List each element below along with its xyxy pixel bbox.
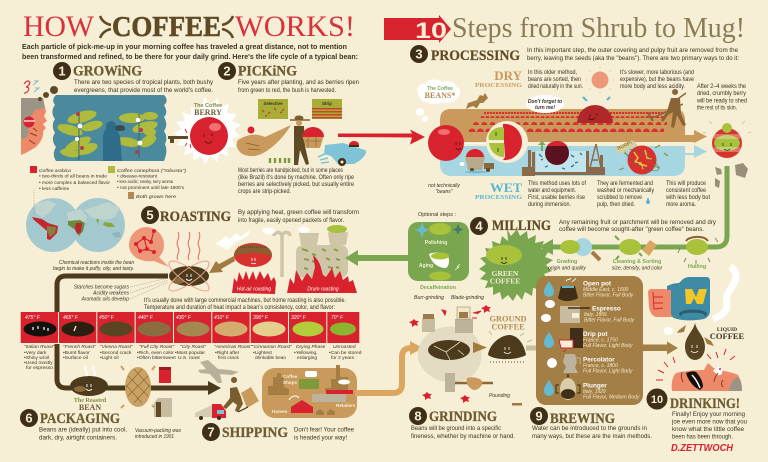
intro text — [22, 42, 358, 61]
not technically note — [428, 183, 460, 195]
brown arrow to mug — [643, 342, 678, 354]
dry text: dried naturally in the sun. — [528, 83, 583, 90]
tan pipe to grinding — [355, 348, 414, 393]
roast descriptions: for 2 years — [331, 355, 355, 361]
step 6 heading — [20, 409, 120, 427]
fermenting berry — [614, 140, 668, 175]
wet texts: First, usable berries rise — [528, 194, 586, 201]
subtitle banner: 10 steps: Steps from Shrub to Mug! — [452, 13, 745, 44]
legend: • disease-resistant — [117, 174, 158, 180]
coffee beans cloud: BEANS* — [425, 91, 455, 100]
grinding labels — [414, 295, 510, 399]
step 5 heading: 5 — [146, 208, 154, 222]
roast descriptions: U.S. roast — [178, 355, 200, 361]
roast descriptions: "City Roast" — [180, 344, 206, 350]
sun icon — [585, 66, 615, 93]
roast descriptions: •Right after — [215, 350, 240, 356]
grading: origin and quality — [548, 266, 586, 272]
dry band — [440, 105, 707, 143]
selective and strip cards — [258, 99, 342, 119]
cleaning & sorting: Cleaning & Sorting — [613, 259, 661, 265]
molecule bubble — [129, 227, 169, 267]
cream strip with dots — [464, 142, 488, 144]
roast strip: 465° F — [63, 315, 79, 321]
processing text: In this important step, the outer covering and pulpy fruit are removed from the — [527, 47, 739, 54]
picking body text: Most berries are handpicked, but in some places — [238, 167, 343, 174]
grinding text — [411, 425, 515, 440]
grinding labels: Burr-grinding — [414, 295, 444, 301]
packaging text: dark, dry, airtight containers. — [39, 434, 117, 442]
dark path: bean to roast strip — [57, 276, 168, 312]
coffee plant panel — [52, 95, 167, 161]
main berry — [428, 125, 464, 161]
wet texts: consistent coffee — [666, 187, 707, 194]
roast descriptions: •Rich, even color — [137, 350, 174, 356]
roast descriptions: •Very dark — [24, 350, 47, 356]
roast strip: 70° F — [331, 315, 344, 321]
brewing panel: France, c. 1800 — [583, 363, 618, 369]
step 10 heading — [646, 388, 740, 412]
intro text: Each particle of pick-me-up in your morning coffee has traveled a great distance, not to mention — [22, 42, 347, 51]
step 4 heading: 4 — [475, 218, 483, 234]
roasting text: By applying heat, green coffee will transform — [238, 209, 359, 216]
pipe stub to brewing — [526, 346, 538, 350]
grinding labels: Blade-grinding — [451, 295, 484, 301]
roasted bean — [70, 366, 108, 412]
picking body text: (like Brazil) it's done by machine. Often only ripe — [238, 174, 355, 181]
step 7 heading: SHIPPING — [222, 425, 288, 441]
step 1 heading: 1 — [58, 64, 66, 78]
roast descriptions: "French Roast" — [63, 344, 96, 350]
roast descriptions: •Light oil — [100, 355, 119, 361]
dry processing label: DRY — [494, 68, 523, 83]
red arrow to processing — [338, 130, 425, 144]
coffee drop — [664, 323, 714, 360]
optional steps panel: Polishing — [425, 240, 447, 246]
dry text — [528, 69, 583, 90]
roast descriptions: drinkable bean — [255, 355, 286, 361]
drinking text — [671, 411, 747, 440]
brewing panel: Bitter Flavor, Full Body — [583, 292, 634, 298]
roasting bean — [165, 257, 213, 295]
brewing panel: Bitter Flavor, Full Body — [584, 318, 635, 324]
picking hand and farmer — [237, 116, 324, 165]
wet texts: with less body but — [665, 194, 710, 201]
don't forget bubble: turn me! — [535, 105, 555, 111]
heat waves — [177, 232, 200, 260]
brewing panel — [536, 276, 643, 405]
vacuum note: Vacuum-packing was — [135, 428, 181, 434]
title: COFFEE — [112, 11, 221, 43]
roast strip: 430° F — [176, 315, 192, 321]
optional steps panel: Aging — [419, 263, 433, 269]
legend: • not prominent until late 1800's — [117, 185, 185, 191]
green coffee star: COFFEE — [490, 276, 520, 286]
vacuum note — [135, 428, 181, 440]
wet texts: This will produce — [666, 180, 707, 187]
shipping destinations: Shops — [283, 380, 297, 385]
brewing panel: Open pot — [583, 280, 612, 288]
shipping text: is headed your way! — [294, 434, 347, 442]
dry text 2 — [620, 69, 695, 90]
dry text 2: It's slower, more laborious (and — [620, 69, 694, 76]
water splash marks — [583, 97, 610, 101]
ground coffee — [488, 314, 532, 362]
roast descriptions: •Shiny w/oil — [24, 355, 49, 361]
shipping destinations: Coffee — [283, 374, 298, 379]
shipping destinations: Homes — [272, 409, 288, 414]
step 6 heading: 6 — [25, 410, 33, 426]
roast descriptions: "Full City Roast" — [139, 344, 175, 350]
optional steps panel: Optional steps : — [418, 212, 456, 218]
roast strip: 475° F — [25, 315, 41, 321]
step 2 heading — [218, 62, 297, 80]
rake farmer — [648, 89, 686, 128]
hulling — [678, 237, 718, 270]
brewing panel: Plunger — [583, 382, 607, 390]
wet texts: This method uses lots of — [528, 180, 586, 187]
step 4 heading — [470, 217, 551, 235]
brewing panel: Full Flavor, Light Body — [583, 343, 633, 349]
roast descriptions: •Often bittersweet — [137, 355, 176, 361]
packaging text: Beans are (ideally) put into cool, — [39, 426, 127, 434]
packaging text — [39, 426, 127, 442]
signature: D.ZETTWOCH — [671, 443, 734, 454]
after weeks text: the rest of its skin. — [697, 104, 737, 112]
step 3 heading — [410, 45, 520, 64]
chemical change list: Acidity weakens — [92, 290, 129, 296]
step 9 heading — [530, 407, 615, 427]
dry text 2: more body and less acidity. — [620, 83, 685, 90]
growing text — [74, 79, 214, 94]
green pipe — [552, 166, 727, 247]
step 7 heading — [202, 423, 288, 441]
roast intro text: Temperature and duration of heat impact a bean's consistency, color, and flavor: — [144, 304, 335, 311]
dry text: beans are sorted, then — [528, 76, 581, 83]
not technically note: "beans" — [435, 189, 453, 195]
roast descriptions: for espresso — [26, 365, 53, 371]
step 5 heading: ROASTING — [160, 209, 231, 225]
brewing panel: Full Flavor, Medium Body — [583, 394, 640, 400]
mug — [648, 277, 710, 320]
brewing panel: Percolator — [583, 356, 615, 364]
roast intro text — [144, 297, 346, 311]
legend — [30, 166, 186, 200]
wet texts: pulp, then dried. — [597, 201, 635, 208]
step 5 heading — [141, 206, 231, 225]
chemical change list: Aromatic oils develop — [80, 296, 129, 302]
wet processing label — [475, 180, 522, 201]
roast strip — [21, 312, 359, 343]
wet texts: washed or mechanically — [596, 187, 655, 194]
growing text: There are two species of tropical plants, both bushy — [74, 79, 214, 86]
after weeks text: After 2–4 weeks the — [697, 83, 747, 90]
grading: Grading — [557, 259, 577, 265]
hot-air roasting: Hot-air roasting — [237, 286, 271, 292]
legend: Both grown here — [136, 194, 176, 200]
milling text: coffee will become sought-after "green coffee" beans. — [559, 226, 704, 233]
horse — [466, 93, 488, 109]
plane — [198, 360, 239, 383]
selective and strip cards: Strip — [322, 101, 332, 106]
coffee berry: The Coffee — [194, 103, 222, 109]
roasted bean: BEAN — [79, 403, 101, 412]
after weeks text: dried, crumbly berry — [697, 90, 747, 97]
sleepy head — [21, 81, 58, 155]
legend: • less acidic; smoky, tarry aroma — [117, 179, 173, 185]
chemical change list — [74, 278, 168, 302]
world map globes — [26, 190, 125, 252]
roast descriptions: Drying Phase — [296, 344, 326, 350]
chemical reactions note: begin to make it puffy, oily, and tasty. — [53, 266, 134, 272]
arrow to bean — [209, 256, 235, 273]
wet tank and berry — [522, 141, 605, 176]
coffee beans cloud — [416, 80, 460, 122]
picking body text: crops are strip-picked. — [238, 188, 291, 195]
step 9 heading: 9 — [535, 408, 543, 424]
wet texts: more aroma. — [666, 201, 696, 208]
liquid coffee: COFFEE — [710, 331, 745, 341]
don't forget bubble — [526, 95, 564, 113]
roast descriptions: •Yellowing, — [294, 350, 318, 356]
roast intro text: It's usually done with large commercial machines, but home roasting is also possible. — [144, 297, 346, 304]
roast descriptions: •Second crack — [100, 350, 132, 356]
brewing panel: Full Flavor, Light Body — [583, 368, 633, 374]
step 8 heading: GRINDING — [429, 409, 497, 425]
roast descriptions: enlarging — [297, 355, 317, 361]
picking body text: berries are selectively picked, but usually entire — [238, 181, 355, 188]
drinking text: joe even more now that you — [671, 418, 747, 426]
legend: Coffee arabica — [39, 168, 71, 174]
tan arrowhead — [410, 341, 423, 355]
berry cross-section — [486, 121, 528, 163]
chemical reactions note: Chemical reactions inside the bean — [59, 260, 134, 266]
harvest machine — [318, 141, 366, 166]
not technically note: not technically — [428, 183, 460, 189]
brewing panel: Middle East, c. 1600 — [583, 287, 629, 293]
roast descriptions: Unroasted — [333, 344, 356, 350]
roast descriptions: "Cinnamon Roast" — [252, 344, 292, 350]
drinking text: been has been through. — [672, 434, 733, 440]
cleaning & sorting: size, density, and color — [612, 266, 663, 272]
shipping text — [294, 426, 355, 442]
coffee beans cloud: The Coffee — [427, 86, 453, 92]
brewing panel: Drip pot — [583, 331, 608, 338]
brewing panel: Espresso — [592, 306, 621, 312]
picking text: Five years after planting, and as berries ripen — [238, 79, 359, 86]
delivery man and truck — [195, 377, 259, 420]
step 1 heading — [53, 62, 142, 80]
steam — [713, 267, 736, 319]
grinding illustrations — [409, 305, 522, 406]
selective and strip cards: Selective — [263, 101, 283, 106]
processing text — [527, 47, 739, 62]
step 2 heading: 2 — [223, 64, 231, 78]
legend: • more complex & balanced flavor — [39, 180, 110, 186]
ground coffee: COFFEE — [492, 322, 524, 332]
coffee bag — [154, 398, 172, 417]
hulling bean split — [703, 121, 751, 158]
ground coffee: GROUND — [490, 314, 527, 324]
dry processing label — [475, 68, 523, 89]
vacuum note: introduced in 1901 — [135, 434, 174, 440]
processing text: berry, leaving the seeds (aka the "beans"). There are two primary ways to do it: — [527, 55, 739, 62]
hulling: Hulling — [688, 264, 706, 270]
wet band — [440, 145, 707, 176]
roast strip: 320° F — [291, 315, 307, 321]
step 3 heading: PROCESSING — [431, 48, 520, 64]
roast descriptions: •Burnt flavor — [63, 350, 90, 356]
green arrow into drum — [345, 250, 408, 266]
wet texts: during immersion. — [528, 201, 571, 208]
roast strip: 410° F — [214, 315, 230, 321]
roast descriptions: •Most popular — [175, 350, 205, 356]
brewing panel: France, c. 1750 — [583, 338, 618, 344]
step 1 heading: GROWiNG — [73, 64, 142, 80]
coffee berry: BERRY — [194, 108, 222, 117]
roast descriptions: "Vienna Roast" — [100, 344, 133, 350]
drum roasting — [287, 225, 357, 293]
fragments — [715, 163, 748, 188]
step 10 heading: 10 — [651, 394, 663, 406]
wet processing label: WET — [490, 180, 522, 195]
legend: Coffee canephora ("robusta") — [117, 168, 186, 174]
roast descriptions — [24, 344, 362, 371]
drum roasting: Drum roasting — [307, 286, 339, 292]
grinding labels: Pounding — [489, 393, 510, 399]
wet texts: scrubbed to remove — [597, 194, 643, 201]
roast strip: 390° F — [253, 315, 269, 321]
drinking text: Finally! Enjoy your morning — [672, 411, 745, 418]
step 3 heading: 3 — [415, 46, 423, 62]
step 7 heading: 7 — [207, 424, 215, 440]
roast strip: 440° F — [138, 315, 154, 321]
dry text 2: expensive), but the beans have — [620, 76, 695, 83]
berry cart — [460, 149, 494, 173]
roast descriptions: •Lightest — [253, 350, 272, 356]
green coffee star: GREEN — [492, 269, 519, 278]
after weeks text: will be ready to shed — [696, 98, 747, 104]
roast strip: 450° F — [99, 315, 115, 321]
roast descriptions: first crack — [218, 355, 239, 361]
fermenting berry: BURP! — [616, 140, 634, 152]
legend: • two-thirds of all beans in trade — [39, 174, 107, 180]
red can — [159, 367, 171, 383]
white steam — [216, 226, 310, 250]
roast descriptions: "American Roast" — [214, 344, 253, 350]
roast descriptions: •Used mostly — [24, 360, 53, 366]
liquid coffee: LIQUID — [717, 327, 737, 333]
picking text — [238, 79, 359, 94]
step 4 heading: MILLING — [492, 218, 551, 234]
brewing text — [532, 425, 652, 440]
wet processing label: PROCESSING — [475, 194, 522, 201]
brewing text: many ways, but these are the main methods. — [532, 433, 652, 440]
title: WORKS! — [235, 10, 355, 43]
brewing panel: Italy, 1855 — [584, 312, 607, 318]
grading — [548, 238, 600, 272]
title: HOW — [23, 10, 95, 43]
shipping destinations: Retailers — [336, 403, 356, 408]
wet texts: water and equipment. — [527, 187, 576, 194]
hot-air roasting — [232, 232, 290, 294]
green coffee star — [479, 229, 553, 301]
decaf label: Decaffeination — [420, 285, 456, 291]
chemical reactions note — [53, 260, 134, 272]
cleaning & sorting — [612, 236, 663, 272]
dry processing label: PROCESSING — [475, 82, 522, 89]
step 6 heading: PACKAGING — [40, 411, 120, 427]
shipping destinations — [262, 365, 357, 418]
title — [23, 10, 355, 43]
roasting text: into fragile, easily opened packets of flavor. — [238, 217, 344, 224]
shipping text: Don't fear! Your coffee — [294, 426, 355, 434]
milling text: Any remaining fruit or parchment will be removed and dry — [559, 219, 717, 226]
green pipe arrowhead — [539, 239, 553, 255]
after weeks text — [696, 83, 747, 112]
roast descriptions: •Surface oil — [63, 355, 88, 361]
drinking text: know what the little coffee — [672, 426, 745, 433]
wet texts: They are fermented and — [597, 180, 653, 187]
burlap sack — [121, 366, 155, 408]
arrowhead into shipping — [208, 381, 221, 395]
chemical change list: Starches become sugars — [74, 284, 129, 290]
coffee berry — [168, 97, 241, 164]
roasted bean: The Roasted — [74, 398, 107, 404]
milling text — [559, 219, 717, 233]
grinding text: fineness, whether by machine or hand. — [411, 433, 515, 440]
picking text: from green to red, the bush is harvested. — [238, 87, 336, 94]
roast descriptions: •Can be stored — [329, 350, 362, 356]
wet texts — [527, 180, 710, 208]
legend: • less caffeine — [39, 186, 69, 192]
step 9 heading: BREWING — [550, 411, 615, 427]
growing text: evergreens, that provide most of the world's coffee. — [74, 87, 213, 94]
dark path: strip to packaging arrow — [57, 344, 210, 388]
dry text: In this older method, — [528, 69, 577, 76]
step 8 heading — [409, 407, 497, 425]
picking body text — [238, 167, 355, 195]
don't forget bubble: Don't forget to — [528, 99, 562, 105]
grinding text: Beans will be ground into a specific — [411, 425, 501, 432]
step 10 heading: DRINKING! — [670, 396, 740, 412]
drinking face — [656, 349, 742, 391]
roast descriptions: "Italian Roast" — [24, 344, 55, 350]
roasting text — [238, 209, 359, 224]
brewing text: Water can be introduced to the grounds in — [532, 425, 647, 432]
intro text: been transformed and refined, to be there for your daily grind. Here's the life cycle of a typical bean: — [22, 52, 358, 61]
subtitle banner: 10 steps: 10 — [415, 18, 447, 43]
step 8 heading: 8 — [414, 408, 422, 424]
optional steps panel — [408, 212, 469, 281]
brewing panel: Italy, 1929 — [583, 389, 606, 395]
step 2 heading: PICKiNG — [238, 64, 297, 80]
